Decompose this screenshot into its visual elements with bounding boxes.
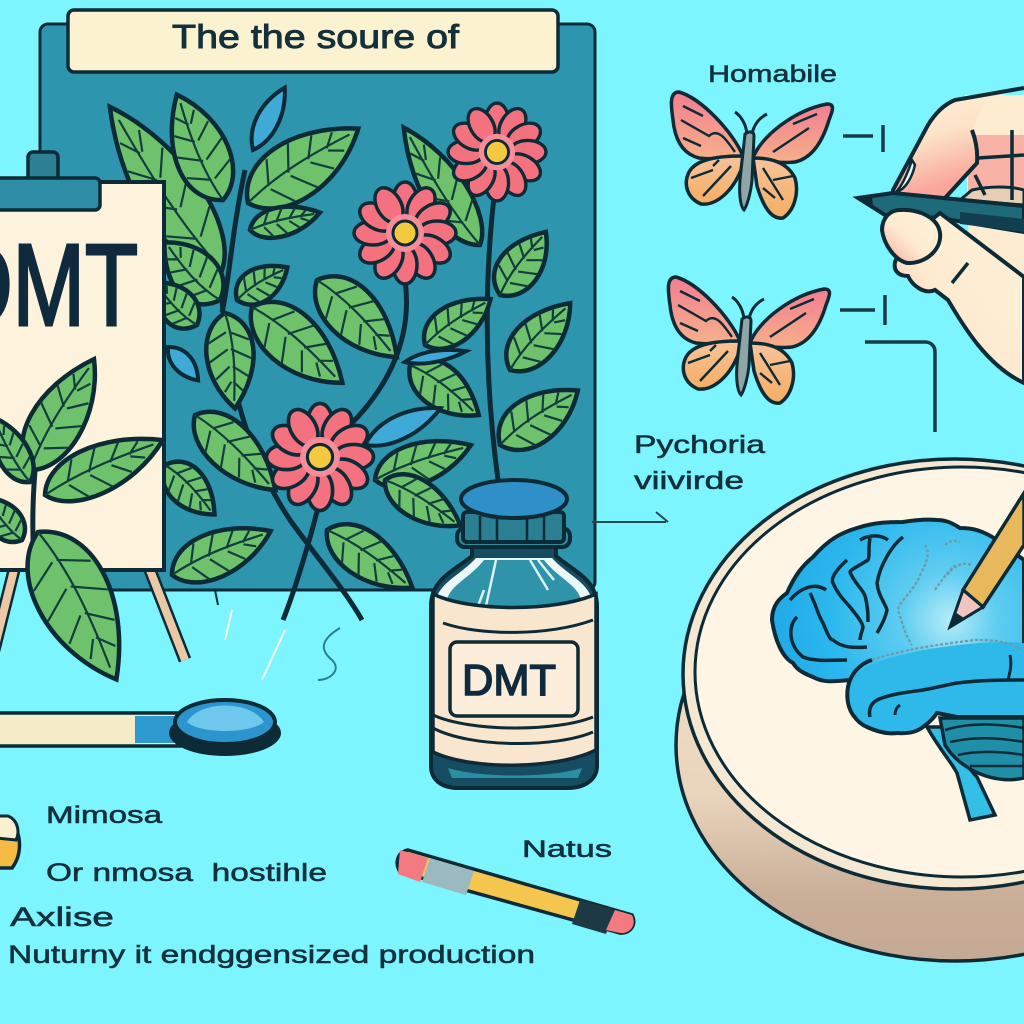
label ticks — [840, 125, 935, 432]
DMT bottle — [431, 480, 597, 788]
text: production caption: Nuturny it endggensized production — [8, 941, 535, 969]
leaves right — [385, 116, 497, 257]
arrow: to brain — [592, 512, 668, 522]
leaves lower — [179, 397, 292, 507]
butterfly: lower — [668, 277, 830, 403]
brain stem — [927, 727, 995, 820]
text: Pychoria viivirde — [634, 431, 765, 495]
panel: plant source backdrop — [40, 24, 595, 590]
small yellow roll icon — [0, 816, 20, 868]
text: Pychoria viivirde: viivirde — [634, 467, 744, 495]
text: Or nmosa hostihle: Or nmosa hostihle — [46, 859, 327, 887]
dish top rim — [683, 459, 1024, 889]
dish side — [676, 529, 1024, 961]
brain — [772, 520, 1024, 820]
palm behind fingers — [965, 95, 1024, 300]
dish top face — [695, 467, 1024, 877]
temporal lobe — [847, 642, 1024, 733]
flowers — [448, 103, 546, 201]
bottle label — [433, 594, 596, 765]
text: Mimosa: Mimosa — [46, 802, 163, 829]
title banner: The the soure of — [172, 18, 460, 55]
panel: DMT easel board — [0, 152, 185, 696]
index finger — [893, 88, 1024, 207]
leaves upper left — [84, 90, 246, 288]
text: Homabile: Homabile — [708, 61, 837, 88]
cerebellum — [940, 718, 1024, 780]
butterfly: upper — [671, 92, 832, 218]
board plant — [0, 346, 172, 696]
text: Axlise: Axlise — [10, 902, 114, 932]
petri dish with brain — [676, 459, 1024, 961]
text: Pychoria viivirde: Pychoria — [634, 431, 765, 459]
DMT bottle: DMT — [462, 656, 556, 705]
text: Natus: Natus — [522, 836, 612, 863]
cerebrum — [772, 520, 1024, 681]
title banner — [68, 10, 558, 72]
pencil — [950, 493, 1024, 627]
sulci — [790, 536, 903, 660]
panel: plant illustration — [84, 82, 591, 620]
lower fingers and thumb — [895, 213, 1024, 383]
yellow marker pen — [397, 850, 634, 934]
hand holding pen — [858, 88, 1024, 383]
pen — [858, 193, 1024, 232]
stems — [222, 170, 498, 620]
sparkle marks under plant — [215, 590, 340, 680]
spoon with blue powder — [0, 700, 281, 756]
